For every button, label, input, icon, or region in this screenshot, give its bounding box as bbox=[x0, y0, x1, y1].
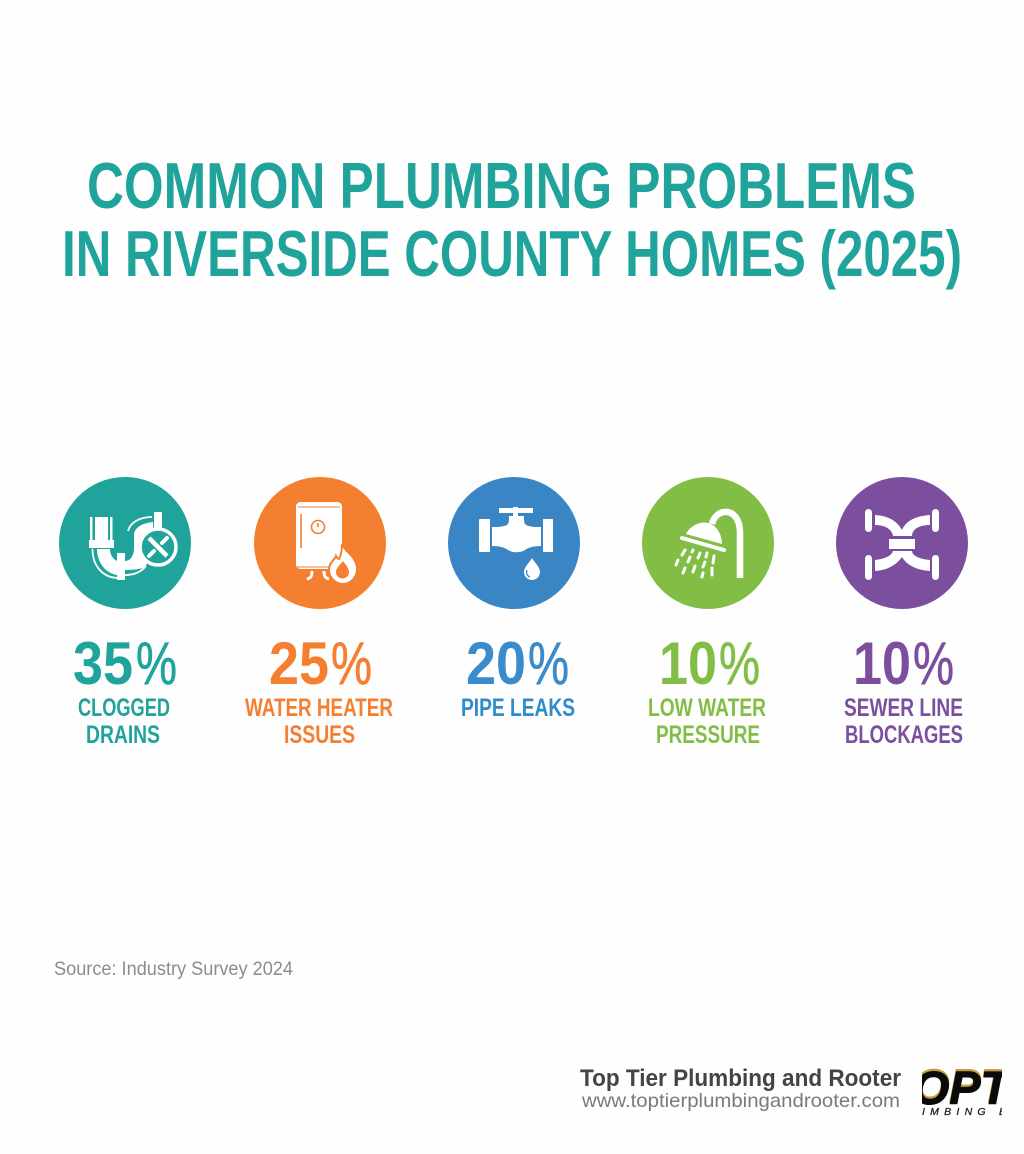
title bbox=[62, 149, 962, 290]
source note: Source: Industry Survey 2024 bbox=[54, 959, 293, 980]
panel: water heater issues bbox=[245, 477, 393, 749]
stat: 10%: 10 bbox=[659, 630, 717, 697]
stat: 35%: 35 bbox=[73, 630, 133, 697]
label: low water pressure bbox=[648, 694, 766, 749]
logo: cropped company logo: IMBING E bbox=[922, 1106, 1007, 1118]
panel: low water pressure bbox=[642, 477, 774, 749]
icon: clogged drain pipe bbox=[59, 477, 191, 609]
stat: 35% bbox=[73, 630, 177, 697]
label: clogged drains: DRAINS bbox=[86, 721, 160, 749]
panel: sewer line blockages bbox=[836, 477, 968, 749]
stat: 35%: % bbox=[136, 630, 177, 697]
footer: company name and website bbox=[580, 1065, 901, 1112]
icon: leaking valve bbox=[448, 477, 580, 609]
label: water heater issues: ISSUES bbox=[284, 721, 355, 749]
panel: clogged drains bbox=[59, 477, 191, 749]
stat: 10% bbox=[853, 630, 954, 697]
logo: cropped company logo: OPT bbox=[913, 1062, 1013, 1114]
label: clogged drains: CLOGGED bbox=[78, 694, 170, 722]
stat: 25% bbox=[269, 630, 372, 697]
label: low water pressure: LOW WATER bbox=[648, 694, 766, 722]
label: low water pressure: PRESSURE bbox=[656, 721, 760, 749]
label: sewer line blockages: SEWER LINE bbox=[844, 694, 963, 722]
stat: 10%: 10 bbox=[853, 630, 911, 697]
logo: cropped company logo: OPT bbox=[913, 1060, 1013, 1112]
stat: 25%: 25 bbox=[269, 630, 329, 697]
panel: pipe leaks bbox=[448, 477, 580, 722]
label: sewer line blockages bbox=[844, 694, 963, 749]
icon: shower head bbox=[642, 477, 774, 609]
label: pipe leaks: PIPE LEAKS bbox=[461, 694, 575, 722]
stat: 10%: % bbox=[719, 630, 760, 697]
stat: 10%: % bbox=[913, 630, 954, 697]
stat: 10% bbox=[659, 630, 760, 697]
icon: water heater with flame bbox=[254, 477, 386, 609]
label: clogged drains bbox=[78, 694, 170, 749]
stat: 20%: 20 bbox=[466, 630, 526, 697]
label: water heater issues: WATER HEATER bbox=[245, 694, 393, 722]
stat: 25%: % bbox=[331, 630, 372, 697]
stat: 20% bbox=[466, 630, 569, 697]
label: sewer line blockages: BLOCKAGES bbox=[845, 721, 963, 749]
icon: crossed sewer pipes bbox=[836, 477, 968, 609]
footer: company name and website: www.toptierplumbingandrooter.com bbox=[581, 1090, 900, 1112]
stat: 20%: % bbox=[528, 630, 569, 697]
label: water heater issues bbox=[245, 694, 393, 749]
footer: company name and website: Top Tier Plumbing and Rooter bbox=[580, 1065, 901, 1092]
